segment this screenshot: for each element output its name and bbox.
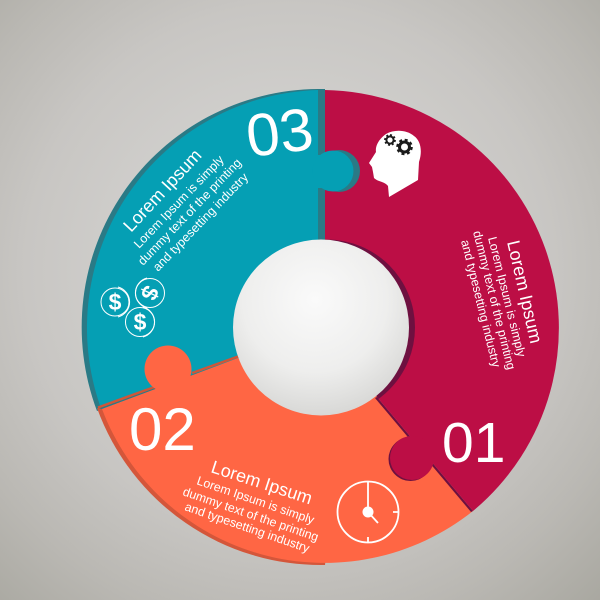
number 03: 03 — [242, 95, 317, 170]
text block: teal: and typesetting industry — [150, 170, 252, 274]
icon: head with gears — [369, 131, 421, 197]
text block: teal: Lorem Ipsum is simply — [131, 152, 227, 251]
text block: teal: Lorem Ipsum — [119, 145, 206, 236]
center white sphere — [233, 240, 409, 416]
icon: coins: $ — [109, 289, 122, 315]
panel 02: coral puzzle piece — [97, 330, 473, 565]
text block: coral — [181, 457, 320, 556]
text block: coral: Lorem Ipsum is simply — [195, 474, 317, 527]
text block: coral: and typesetting industry — [183, 500, 312, 556]
teal knob — [312, 150, 360, 192]
icon: coins: $ — [135, 282, 164, 304]
text block: crimson: Lorem Ipsum — [503, 238, 546, 345]
icon: coins: $ — [134, 309, 147, 335]
text block: crimson — [458, 229, 546, 371]
number 02: 02 — [129, 396, 196, 463]
text block: coral: dummy text of the printing — [181, 485, 320, 544]
text block: coral: Lorem Ipsum — [209, 457, 315, 508]
text block: teal: dummy text of the printing — [135, 156, 244, 268]
number 01: 01 — [442, 411, 505, 475]
text block: crimson: and typesetting industry — [458, 238, 504, 369]
icon: clock — [338, 481, 399, 543]
icon: coins — [101, 278, 164, 337]
text block: crimson: dummy text of the printing — [470, 229, 518, 371]
panel 03: teal puzzle piece — [82, 89, 325, 411]
panel 01: crimson puzzle piece — [325, 90, 559, 512]
text block: crimson: Lorem Ipsum is simply — [485, 235, 529, 359]
